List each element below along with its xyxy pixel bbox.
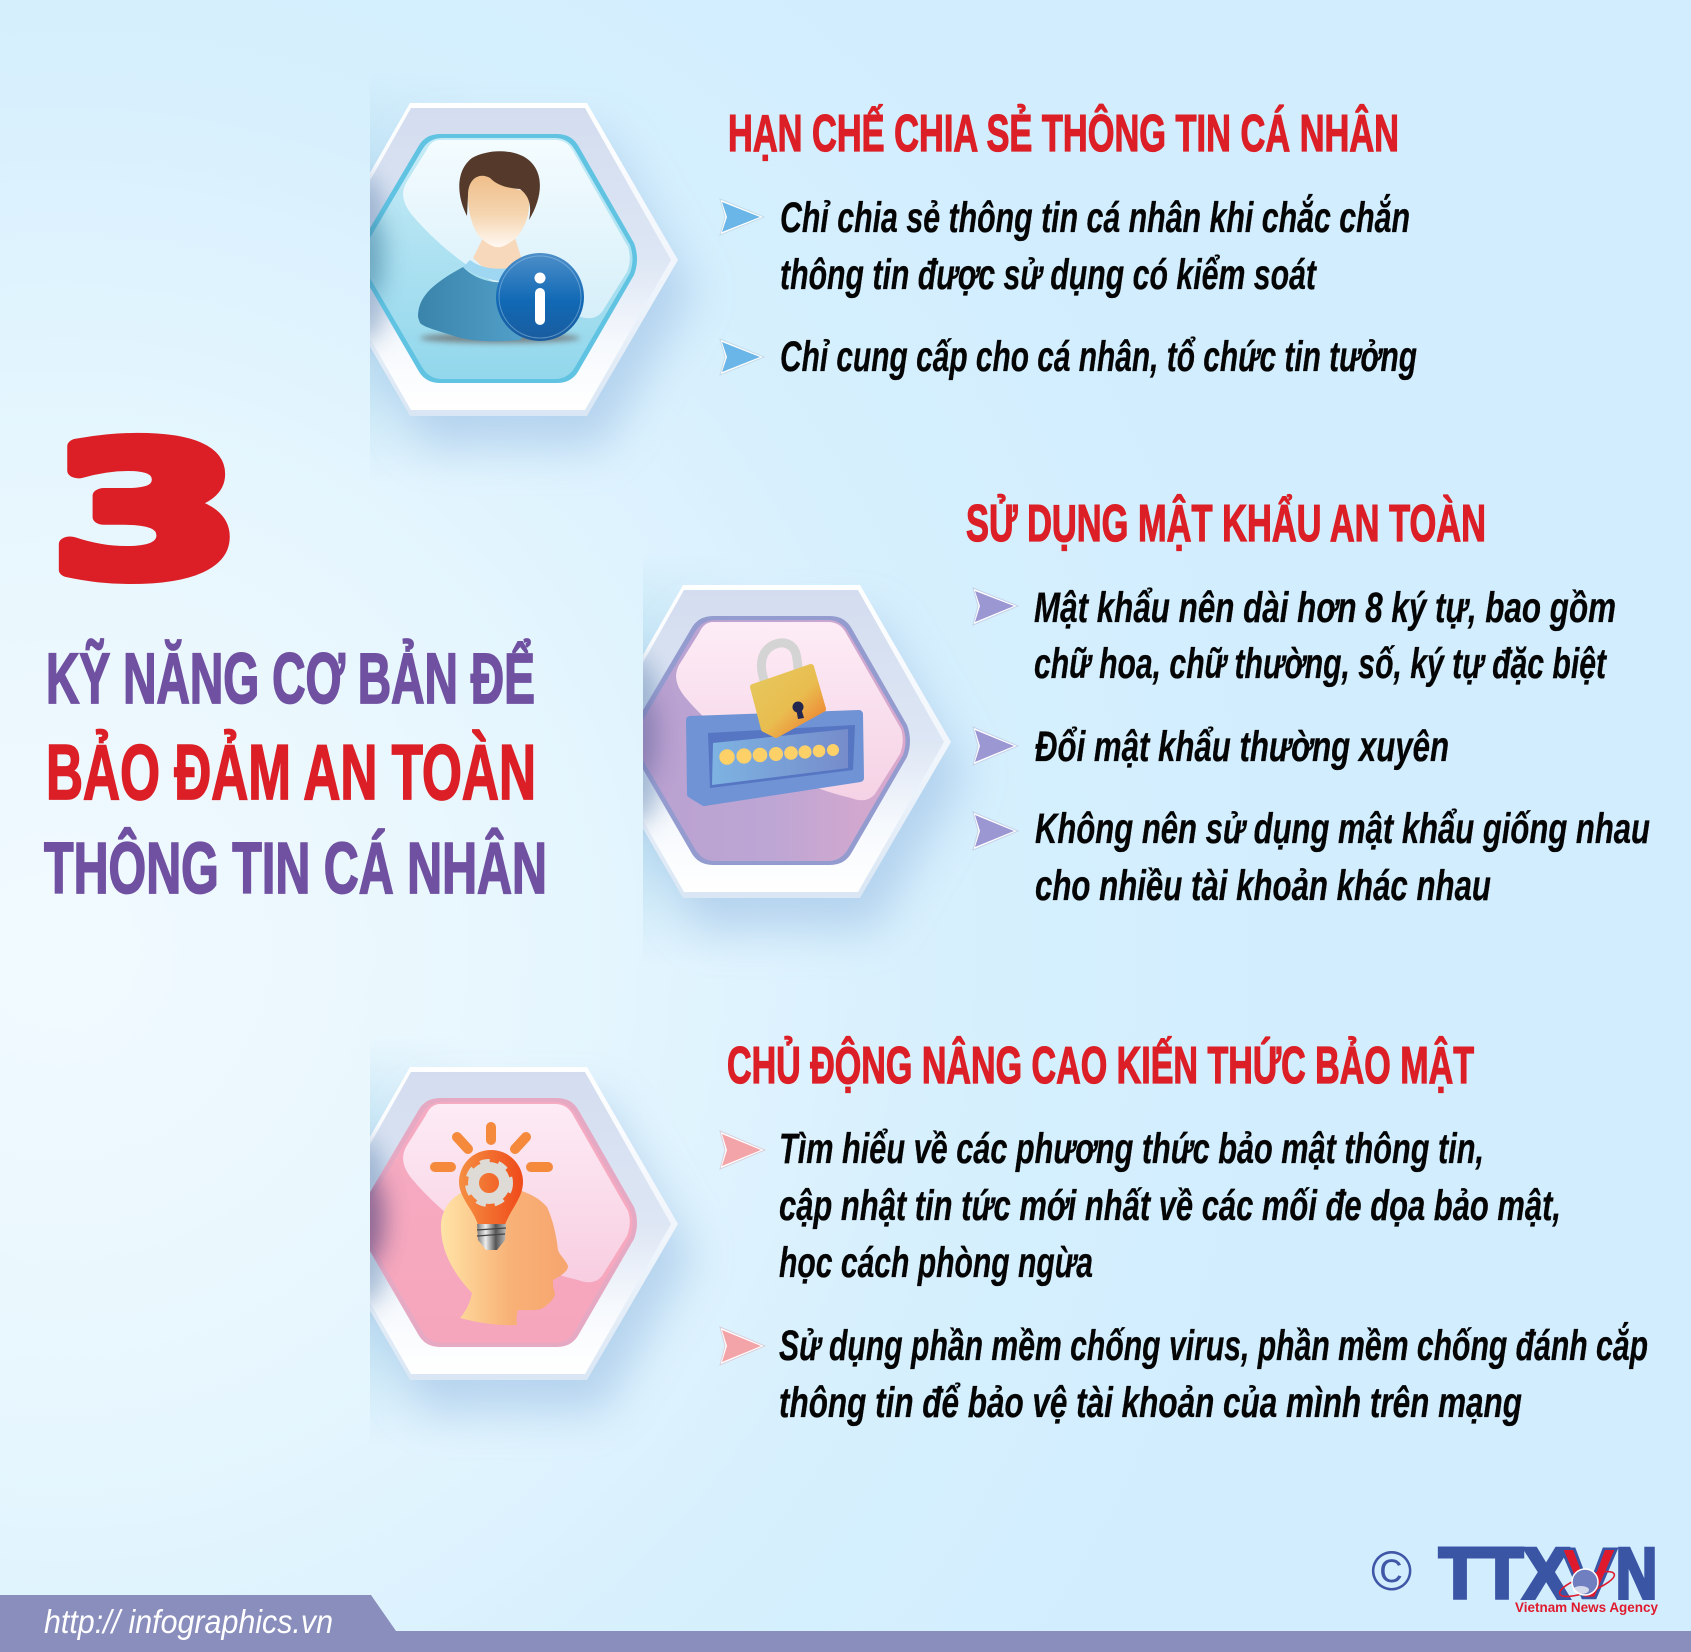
icon: person with info badge <box>418 151 584 343</box>
icon: arrow bullet blue <box>720 199 764 235</box>
icon: arrow bullet pink <box>720 1131 765 1169</box>
big number 3: 3 <box>52 408 240 617</box>
section 2 bullet list: cho nhiều tài khoản khác nhau <box>1035 862 1491 910</box>
section 2 bullet list <box>973 584 1650 910</box>
main title: KỸ NĂNG CƠ BẢN ĐỂ <box>46 639 535 719</box>
main title: BẢO ĐẢM AN TOÀN <box>46 728 536 816</box>
icon: arrow bullet pink second <box>720 1327 765 1365</box>
panel: knowledge icon hexagon <box>370 1054 704 1434</box>
section 1 bullet list <box>720 193 1417 381</box>
logo: TTXVN: N <box>1616 1535 1657 1614</box>
main title: THÔNG TIN CÁ NHÂN <box>44 828 547 909</box>
logo: TTXVN: V <box>1561 1535 1617 1614</box>
icon: globe with orbit <box>1557 1567 1617 1601</box>
footer bar <box>0 1595 1691 1652</box>
icon: arrow bullet purple third <box>973 812 1018 850</box>
footer url: http:// infographics.vn <box>44 1603 333 1640</box>
logo: TTXVN: TTX <box>1439 1535 1569 1614</box>
icon: password box and padlock <box>690 643 860 802</box>
section 3 bullet list: học cách phòng ngừa <box>779 1239 1093 1287</box>
icon: head with light bulb and gear <box>435 1127 568 1325</box>
section 3 bullet list <box>720 1125 1648 1427</box>
logo: TTXVN: Vietnam News Agency <box>1515 1599 1658 1615</box>
icon: arrow bullet purple second <box>973 727 1018 765</box>
section 1 bullet list: Chỉ cung cấp cho cá nhân, tổ chức tin tưởng <box>780 333 1417 381</box>
copyright symbol: © <box>1371 1539 1412 1602</box>
main title <box>44 639 547 909</box>
section 1 bullet list: Chỉ chia sẻ thông tin cá nhân khi chắc chắn <box>780 193 1410 242</box>
icon: arrow bullet purple <box>973 588 1018 625</box>
logo: TTXVN <box>1439 1535 1658 1615</box>
section 2 bullet list: Đổi mật khẩu thường xuyên <box>1035 723 1449 771</box>
panel: password icon hexagon <box>643 578 974 951</box>
section 1 bullet list: thông tin được sử dụng có kiểm soát <box>780 251 1317 299</box>
icon: arrow bullet blue second <box>720 339 764 375</box>
panel: limit sharing icon hexagon <box>370 101 701 470</box>
